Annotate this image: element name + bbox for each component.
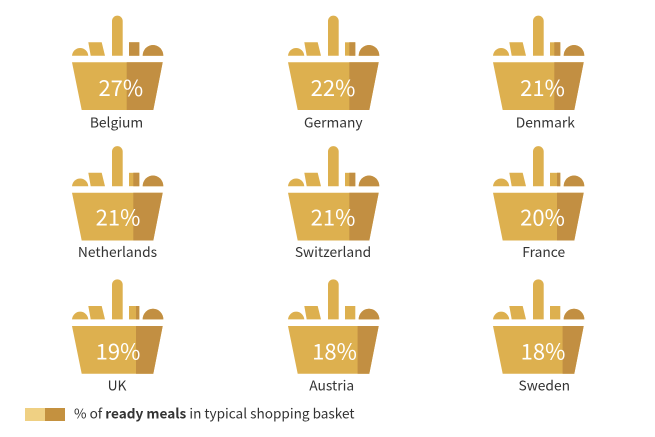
icon: basket France (493, 146, 584, 240)
legend swatch: dark (45, 408, 65, 421)
basket: Netherlands (72, 146, 163, 261)
legend (25, 402, 355, 422)
label: France: France (522, 241, 565, 261)
icon: basket Belgium (72, 16, 163, 110)
label: Austria: Austria (309, 374, 354, 394)
icon: basket Sweden (493, 279, 584, 374)
value: Sweden: 18% (521, 334, 565, 366)
value: France: 20% (520, 201, 565, 233)
basket: Switzerland (288, 146, 379, 261)
icon: basket Austria (288, 279, 379, 374)
value: Belgium: 27% (98, 71, 143, 103)
basket: Austria (288, 279, 379, 394)
value: Germany: 22% (311, 71, 355, 103)
icon: basket Germany (288, 16, 379, 110)
basket: Belgium (72, 16, 163, 131)
label: Sweden: Sweden (519, 374, 570, 394)
icon: basket UK (72, 279, 163, 374)
basket: Sweden (493, 279, 584, 394)
basket: UK (72, 279, 163, 394)
label: Denmark: Denmark (516, 112, 575, 132)
label: Switzerland: Switzerland (295, 241, 371, 261)
label: Belgium: Belgium (90, 112, 143, 132)
icon: basket Switzerland (288, 146, 379, 240)
label: Germany: Germany (304, 112, 363, 132)
basket: France (493, 146, 584, 261)
icon: basket Netherlands (72, 146, 163, 240)
legend text: % of ready meals in typical shopping basket (74, 402, 355, 422)
value: UK: 19% (96, 334, 140, 366)
basket: Germany (288, 16, 379, 131)
legend swatch: light (25, 408, 45, 421)
value: Netherlands: 21% (96, 201, 140, 233)
value: Austria: 18% (312, 334, 357, 366)
infographic: ready meals by country (25, 16, 584, 422)
label: Netherlands: Netherlands (78, 241, 157, 261)
label: UK: UK (108, 374, 127, 394)
value: Denmark: 21% (520, 71, 565, 103)
basket: Denmark (493, 16, 584, 131)
value: Switzerland: 21% (311, 201, 355, 233)
icon: basket Denmark (493, 16, 584, 110)
